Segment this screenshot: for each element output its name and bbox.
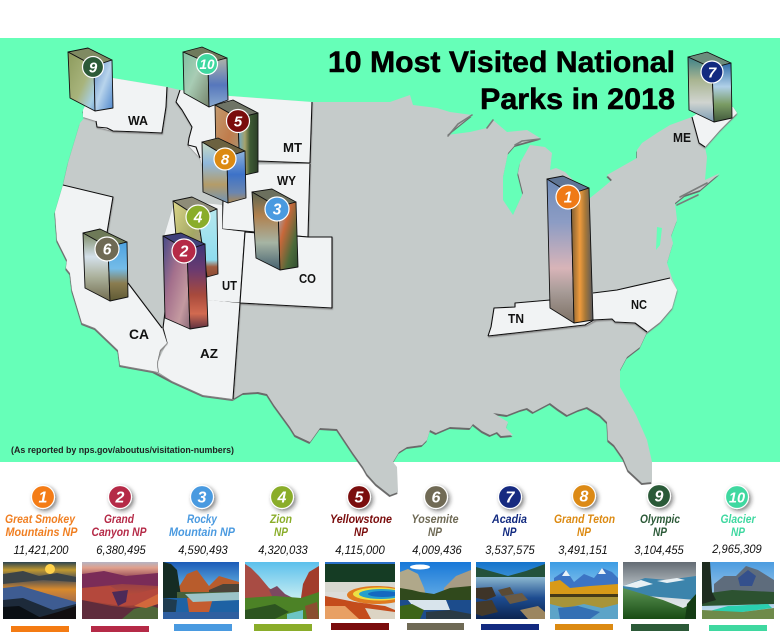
state labels: NC [631, 298, 647, 312]
state: Colorado [240, 232, 332, 308]
park 6: Yosemite: 4,009,436 [412, 543, 462, 557]
color bar [91, 626, 149, 632]
block 6: Yosemite [83, 229, 128, 301]
color bar [555, 624, 613, 630]
park 2: Grand Canyon: Canyon NP [92, 525, 147, 539]
park 9: Olympic: 9 [655, 488, 664, 506]
park 6: Yosemite [400, 486, 471, 630]
color bar [481, 624, 539, 630]
park 6: Yosemite: NP [428, 525, 443, 539]
park 8: Grand Teton: 8 [580, 488, 589, 506]
source note: (As reported by nps.gov/aboutus/visitation-numbers) [11, 445, 234, 455]
state: California [55, 185, 167, 372]
state: Washington [83, 76, 167, 133]
state: Arizona [157, 296, 240, 399]
park 1: Great Smoky Mountains [3, 486, 78, 632]
state: Wyoming [222, 164, 310, 237]
park 1: Great Smoky Mountains: Great Smokey [5, 512, 76, 526]
park 8: Grand Teton: 3,491,151 [558, 543, 608, 557]
teal background panel [0, 38, 780, 462]
color bar [11, 626, 69, 632]
park 3: Rocky Mountain: 4,590,493 [178, 543, 228, 557]
park 2: Grand Canyon: 2 [115, 490, 125, 506]
photo: Zion [245, 562, 319, 619]
photo: Great Smoky Mountains [3, 562, 76, 619]
photo: Grand Teton [550, 562, 618, 619]
park 3: Rocky Mountain: Rocky [187, 512, 218, 526]
park 2: Grand Canyon: 6,380,495 [96, 543, 146, 557]
block 2: Grand Canyon: 2 [179, 244, 189, 260]
state: North Carolina [593, 278, 677, 332]
photo: Yellowstone [325, 562, 395, 619]
park 9: Olympic [623, 484, 696, 631]
park 5: Yellowstone: Yellowstone [330, 512, 392, 526]
park 8: Grand Teton: NP [577, 525, 592, 539]
photo: Rocky Mountain [163, 562, 239, 619]
title [328, 46, 675, 116]
park 3: Rocky Mountain [163, 486, 239, 631]
color bar [709, 625, 767, 631]
state labels: AZ [200, 347, 218, 361]
state: Maine [692, 105, 737, 147]
state labels: ME [673, 131, 691, 145]
block 4: Zion: 4 [193, 210, 203, 226]
park 8: Grand Teton: Grand Teton [554, 512, 615, 526]
land mass [55, 78, 737, 495]
state labels: CO [299, 272, 316, 286]
color bar [254, 624, 312, 631]
photo: Yosemite [400, 562, 471, 619]
park 1: Great Smoky Mountains: Mountains NP [6, 525, 78, 539]
park 4: Zion: 4 [277, 490, 287, 506]
park 2: Grand Canyon [82, 486, 158, 632]
park 9: Olympic: Olympic [640, 512, 680, 526]
state labels [128, 114, 691, 361]
block 5: Yellowstone: 5 [234, 114, 243, 130]
block 10: Glacier: 10 [199, 57, 215, 72]
block 1: Great Smoky Mountains: 1 [564, 190, 572, 206]
block 5: Yellowstone [215, 100, 258, 176]
park 1: Great Smoky Mountains: 1 [39, 490, 48, 506]
park 10: Glacier: NP [731, 525, 746, 539]
color bar [174, 624, 232, 631]
state labels: CA [129, 326, 149, 342]
park 6: Yosemite: 6 [432, 490, 441, 506]
park 7: Acadia: 3,537,575 [485, 543, 535, 557]
park 7: Acadia: 7 [506, 490, 516, 506]
park 10: Glacier: 10 [729, 490, 745, 506]
block 6: Yosemite: 6 [103, 242, 112, 258]
park 3: Rocky Mountain: Mountain NP [169, 525, 236, 539]
state: Tennessee [488, 300, 596, 336]
park 5: Yellowstone [325, 486, 407, 630]
park 7: Acadia: NP [502, 525, 517, 539]
park 7: Acadia [476, 486, 545, 630]
title: Parks in 2018 [480, 83, 675, 116]
block 4: Zion [173, 197, 218, 277]
block 7: Acadia: 7 [708, 64, 717, 82]
park 10: Glacier [702, 486, 774, 631]
block 7: Acadia [688, 52, 732, 122]
block 2: Grand Canyon [163, 233, 208, 329]
photo: Glacier [702, 562, 774, 619]
block 10: Glacier [183, 47, 228, 107]
color bar [407, 623, 464, 630]
block 9: Olympic [68, 48, 113, 111]
state labels: UT [222, 279, 237, 293]
state labels: WY [277, 174, 297, 188]
photo: Grand Canyon [82, 562, 158, 619]
state: Utah [163, 200, 245, 303]
park 8: Grand Teton [550, 484, 618, 630]
park 4: Zion: 4,320,033 [258, 543, 308, 557]
photo: Acadia [476, 562, 545, 619]
park 10: Glacier: 2,965,309 [711, 542, 762, 556]
block 8: Grand Teton [202, 138, 246, 203]
block 8: Grand Teton: 8 [221, 152, 230, 168]
park 1: Great Smoky Mountains: 11,421,200 [14, 543, 69, 557]
title: 10 Most Visited National [328, 46, 675, 79]
color bar [331, 623, 389, 630]
block 3: Rocky Mountain [252, 189, 298, 270]
block 3: Rocky Mountain: 3 [273, 202, 282, 218]
color bar [631, 624, 689, 631]
park 7: Acadia: Acadia [491, 512, 527, 526]
park 6: Yosemite: Yosemite [412, 512, 459, 526]
park 9: Olympic: 3,104,455 [634, 543, 684, 557]
park 9: Olympic: NP [653, 525, 668, 539]
park 10: Glacier: Glacier [720, 512, 757, 526]
state labels: WA [128, 114, 148, 128]
map of the United States [55, 76, 737, 495]
photo: Olympic [623, 562, 696, 619]
state labels: TN [508, 312, 524, 326]
park 4: Zion: NP [274, 525, 289, 539]
park 4: Zion: Zion [269, 512, 292, 526]
state labels: MT [283, 141, 302, 155]
park 4: Zion [245, 486, 319, 631]
park 3: Rocky Mountain: 3 [198, 490, 207, 506]
Chesapeake Bay inlet [656, 227, 662, 250]
park 5: Yellowstone: 4,115,000 [335, 543, 385, 557]
block 9: Olympic: 9 [89, 60, 98, 76]
shoreline shading [448, 115, 707, 205]
park 2: Grand Canyon: Grand [104, 512, 135, 526]
park 5: Yellowstone: 5 [355, 490, 365, 506]
state: Montana [176, 90, 312, 175]
park 5: Yellowstone: NP [354, 525, 369, 539]
block 1: Great Smoky Mountains [547, 176, 593, 323]
